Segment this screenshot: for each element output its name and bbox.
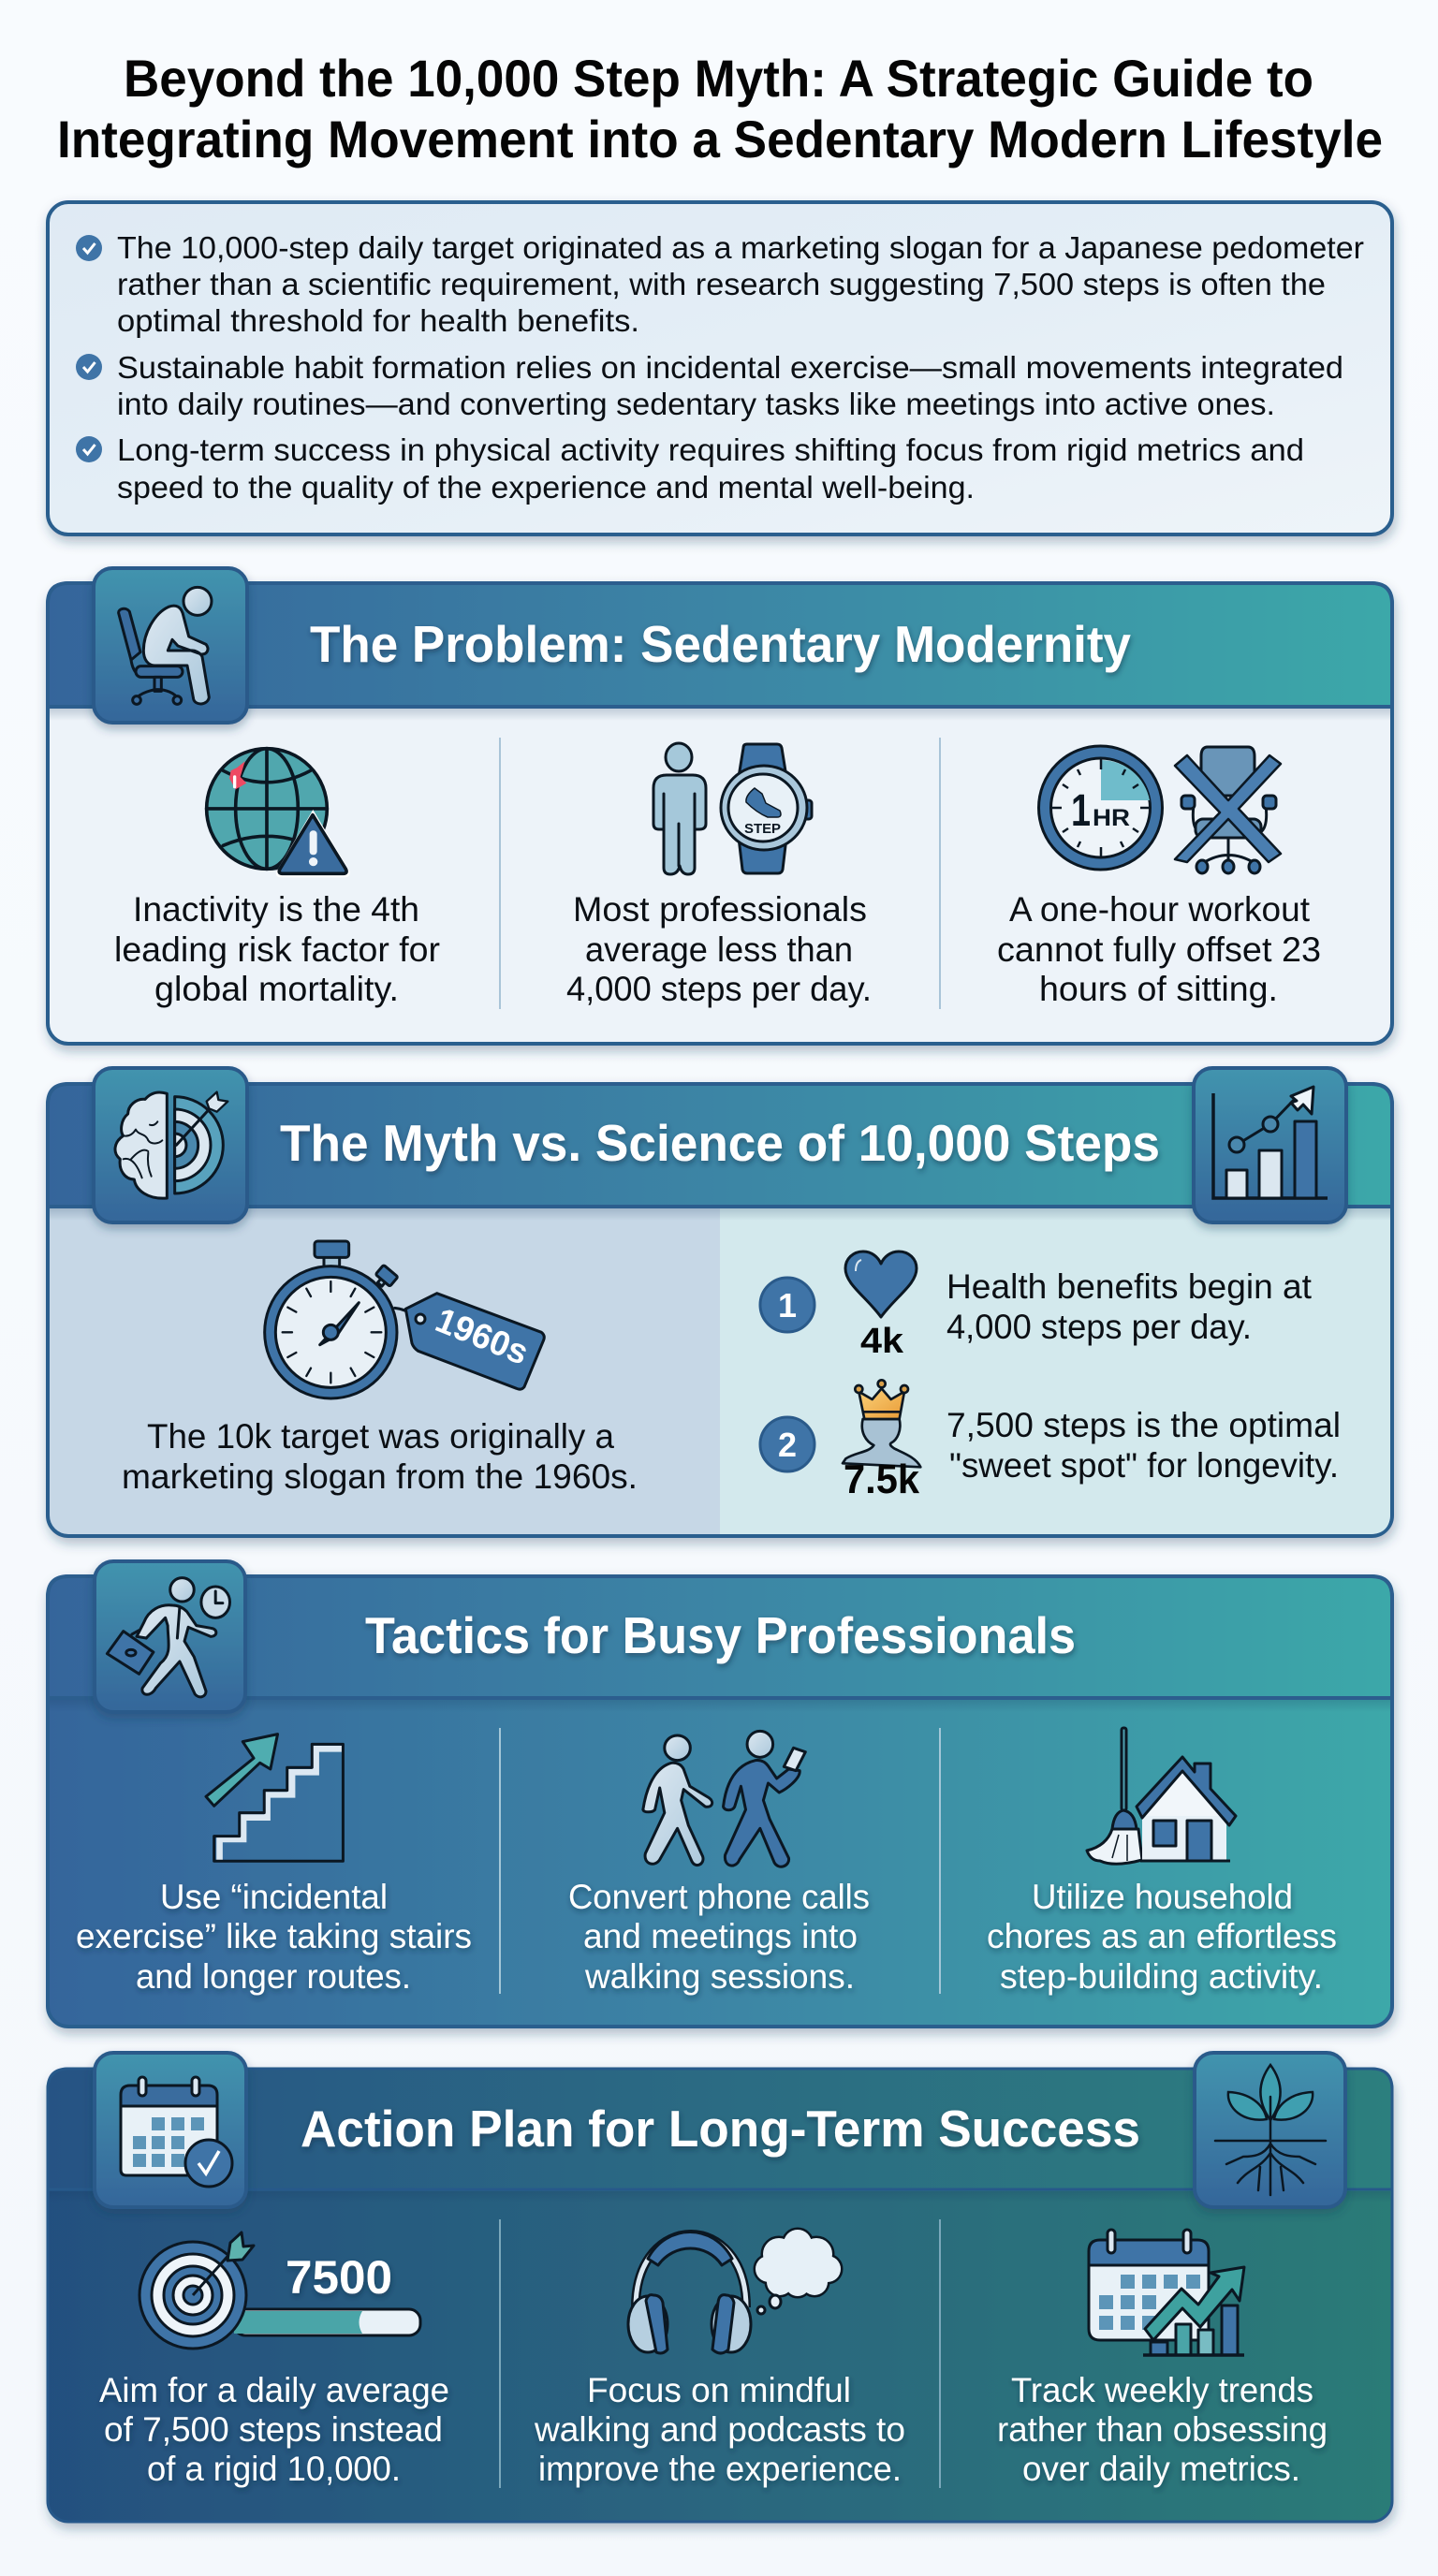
icon: person and step watch: STEP — [744, 821, 781, 837]
column dividers — [500, 1728, 940, 1994]
text: phone calls — [568, 1878, 870, 1996]
text: marketing slogan: The 10k target was originally a — [147, 1417, 614, 1456]
bullet 1 — [76, 230, 1364, 338]
text: 4000 steps: Health benefits begin at — [946, 1267, 1313, 1306]
bullet 1: The 10,000-step daily target originated as a marketing slogan for a Japanese pedometer — [117, 230, 1364, 265]
title: Integrating Movement into a Sedentary Modern Lifestyle — [57, 110, 1383, 168]
number: 7500: 7500 — [286, 2251, 392, 2304]
icon tile: growth chart — [1194, 1068, 1346, 1222]
text: household chores: chores as an effortless — [987, 1917, 1337, 1955]
text: incidental exercise: exercise” like taking stairs — [76, 1917, 472, 1955]
column dividers — [500, 738, 940, 1009]
icon: calendar with trend — [1089, 2230, 1244, 2355]
text: professionals: Most professionals — [573, 890, 867, 929]
panel: the problem — [48, 568, 1392, 1044]
icon tile: walking businessman — [95, 1561, 245, 1712]
text: workout — [997, 890, 1321, 1008]
text: phone calls: walking sessions. — [584, 1957, 855, 1996]
text: inactivity — [114, 890, 440, 1008]
icon: one hour clock: HR — [1093, 805, 1130, 831]
icon: two walkers with phone — [643, 1731, 805, 1866]
badge 1 — [760, 1278, 814, 1332]
bullet 3 — [76, 432, 1304, 505]
bullet 2: Sustainable habit formation relies on incidental exercise—small movements integrated — [117, 350, 1343, 385]
title — [57, 49, 1383, 168]
text: weekly trends: rather than obsessing — [997, 2410, 1328, 2449]
bullet 3: Long-term success in physical activity requires shifting focus from rigid metrics and — [117, 432, 1304, 467]
heading: The Problem: Sedentary Modernity — [310, 615, 1131, 673]
icon: crowned person 7.5k — [843, 1380, 920, 1502]
bullet 2: into daily routines—and converting sedentary tasks like meetings into active ones. — [117, 387, 1275, 421]
bullet 1: optimal threshold for health benefits. — [117, 303, 639, 338]
text: marketing slogan: marketing slogan from the 1960s. — [122, 1457, 638, 1496]
icon: heart 4k — [845, 1251, 917, 1361]
text: weekly trends: Track weekly trends — [1011, 2371, 1313, 2409]
text: inactivity: Inactivity is the 4th — [133, 890, 419, 929]
icon: stopwatch with tag: 1960s — [431, 1299, 535, 1372]
text: daily average: Aim for a daily average — [99, 2371, 449, 2409]
text: mindful walking: improve the experience. — [538, 2450, 902, 2488]
text: daily average — [99, 2371, 449, 2488]
badge 2: 2 — [778, 1426, 797, 1464]
text: incidental exercise — [76, 1878, 472, 1996]
title: Beyond the 10,000 Step Myth: A Strategic Guide to — [124, 49, 1313, 108]
icon: crowned person 7.5k: 7.5k — [844, 1456, 919, 1502]
text: incidental exercise: and longer routes. — [136, 1957, 411, 1996]
text: 4000 steps — [946, 1267, 1313, 1346]
header band — [48, 2069, 1392, 2189]
badge 1: 1 — [778, 1286, 797, 1325]
text: 7500 steps: 7,500 steps is the optimal — [946, 1406, 1341, 1444]
icon tile: brain and target — [94, 1068, 247, 1222]
text: daily average: of 7,500 steps instead — [104, 2410, 443, 2449]
text: workout: cannot fully offset 23 — [997, 930, 1321, 969]
right science half — [720, 1207, 1390, 1534]
header band — [48, 1084, 1392, 1207]
heading: Tactics for Busy Professionals — [365, 1606, 1076, 1664]
text: mindful walking — [534, 2371, 905, 2488]
icon tile: plant with roots — [1195, 2053, 1345, 2207]
icon: thought cloud — [756, 2230, 841, 2314]
icon: target with progress bar — [139, 2232, 420, 2349]
text: workout: hours of sitting. — [1039, 970, 1278, 1008]
text: incidental exercise: Use “incidental — [160, 1878, 388, 1916]
text: phone calls: and meetings into — [583, 1917, 858, 1955]
text: 4000 steps: 4,000 steps per day. — [946, 1308, 1252, 1346]
text: household chores: Utilize household — [1032, 1878, 1293, 1916]
icon: heart 4k: 4k — [860, 1322, 904, 1361]
header band — [48, 583, 1392, 707]
icon: headphones — [628, 2232, 751, 2353]
text: professionals — [566, 890, 872, 1008]
icon: one hour clock — [1039, 746, 1163, 870]
icon tile: calendar with check — [95, 2053, 246, 2207]
icon: stairs with arrow — [206, 1734, 343, 1861]
panel: tactics — [48, 1561, 1392, 2027]
text: household chores — [987, 1878, 1337, 1996]
text: weekly trends: over daily metrics. — [1022, 2450, 1300, 2488]
badge 2 — [760, 1417, 814, 1471]
panel: myth vs science — [48, 1068, 1392, 1536]
text: workout: A one-hour workout — [1009, 890, 1311, 929]
icon: crossed out office chair — [1175, 747, 1281, 873]
panel: summary — [48, 202, 1392, 534]
heading: Action Plan for Long-Term Success — [301, 2100, 1140, 2158]
text: inactivity: global mortality. — [154, 970, 399, 1008]
header band — [48, 1576, 1392, 1698]
text: professionals: 4,000 steps per day. — [566, 970, 872, 1008]
icon: person and step watch — [653, 743, 812, 874]
text: daily average: of a rigid 10,000. — [147, 2450, 401, 2488]
text: 7500 steps: "sweet spot" for longevity. — [949, 1446, 1339, 1485]
icon: stopwatch with tag — [265, 1241, 544, 1398]
text: professionals: average less than — [585, 930, 853, 969]
icon: broom and house — [1087, 1728, 1236, 1864]
text: phone calls: Convert phone calls — [568, 1878, 870, 1916]
bullet 1: rather than a scientific requirement, with research suggesting 7,500 steps is often the — [117, 267, 1326, 301]
bullet 3: speed to the quality of the experience and mental well-being. — [117, 470, 975, 505]
text: weekly trends — [997, 2371, 1328, 2488]
icon: globe with warning — [207, 749, 350, 877]
bullet 2 — [76, 350, 1343, 421]
icon: one hour clock: 1 — [1071, 786, 1091, 836]
text: mindful walking: Focus on mindful — [587, 2371, 851, 2409]
text: 7500 steps — [946, 1406, 1341, 1485]
text: marketing slogan — [122, 1417, 638, 1496]
column dividers — [500, 2219, 940, 2488]
text: household chores: step-building activity. — [1000, 1957, 1323, 1996]
panel: action plan — [48, 2053, 1392, 2522]
text: mindful walking: walking and podcasts to — [534, 2410, 905, 2449]
text: inactivity: leading risk factor for — [114, 930, 440, 969]
heading: The Myth vs. Science of 10,000 Steps — [280, 1114, 1160, 1172]
icon tile: seated person — [94, 568, 247, 723]
